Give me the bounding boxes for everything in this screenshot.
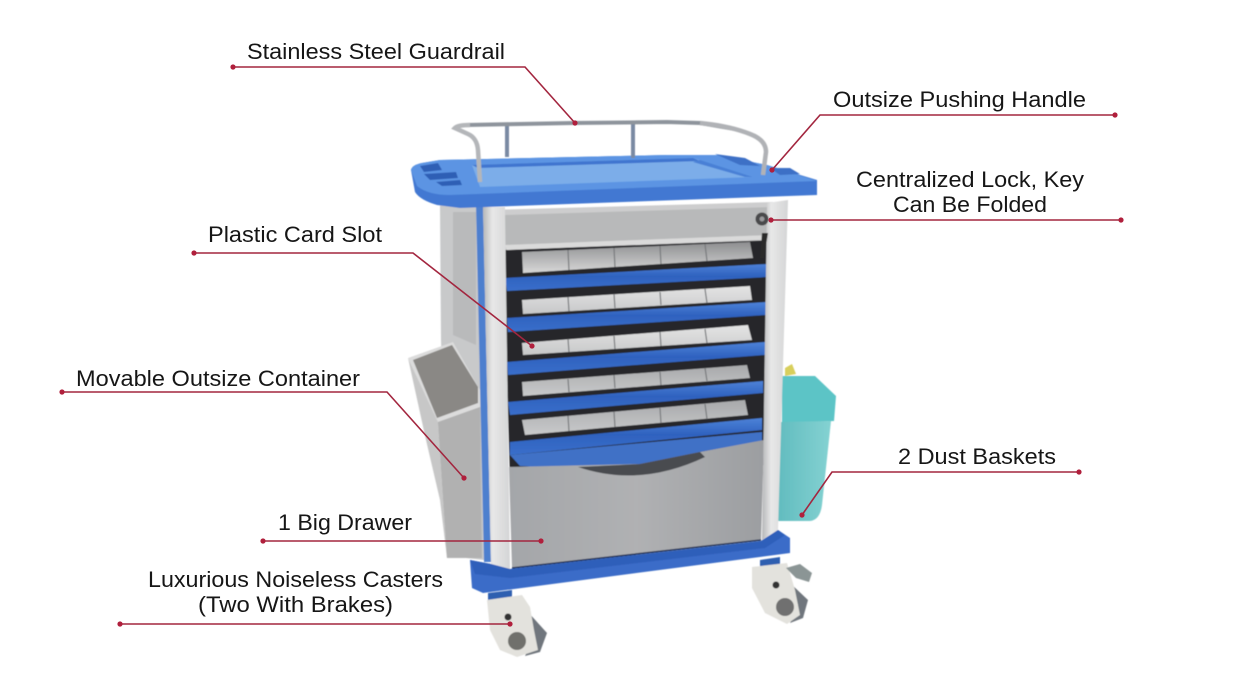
leader: plastic card slot	[191, 250, 535, 349]
leader: stainless steel guardrail	[230, 64, 578, 126]
caster left	[487, 590, 547, 657]
right post	[762, 200, 788, 540]
lock panel	[490, 202, 775, 250]
bottom base	[470, 530, 790, 593]
label: centralized lock	[856, 167, 1085, 217]
leader: centralized lock	[768, 217, 1124, 223]
drawer 1	[505, 242, 768, 291]
caster right	[752, 557, 812, 624]
dark front body	[503, 232, 772, 480]
label: centralized lock: Centralized Lock, Key	[856, 167, 1085, 192]
label: casters: (Two With Brakes)	[198, 592, 393, 617]
label: stainless steel guardrail: Stainless Steel Guardrail	[247, 39, 505, 64]
movable outsize container	[408, 342, 482, 558]
leader: big drawer	[260, 538, 544, 544]
label: big drawer: 1 Big Drawer	[278, 510, 413, 535]
label: casters: Luxurious Noiseless Casters	[148, 567, 443, 592]
top tray	[411, 154, 817, 208]
icon: medical trolley	[408, 122, 836, 657]
label: centralized lock: Can Be Folded	[893, 192, 1047, 217]
leader: outsize pushing handle	[769, 112, 1118, 173]
leader: movable outsize container	[59, 389, 467, 481]
drawer 5	[510, 400, 762, 468]
stainless steel guardrail	[455, 122, 766, 182]
icon: key lock	[756, 212, 768, 258]
dust basket	[778, 364, 836, 521]
leader: dust baskets	[799, 469, 1082, 518]
label: outsize pushing handle: Outsize Pushing Handle	[833, 87, 1086, 112]
label: movable outsize container: Movable Outsize Container	[76, 366, 361, 391]
label: plastic card slot: Plastic Card Slot	[208, 222, 383, 247]
blue edge strip	[476, 205, 491, 562]
left post	[483, 207, 510, 569]
drawer 2	[507, 286, 767, 332]
drawer 3	[507, 325, 765, 375]
label: dust baskets: 2 Dust Baskets	[898, 444, 1056, 469]
drawer 4	[508, 365, 763, 415]
big drawer	[509, 440, 764, 568]
label: casters	[148, 567, 443, 617]
side panel of cart	[440, 205, 484, 560]
leader: casters	[117, 621, 513, 627]
